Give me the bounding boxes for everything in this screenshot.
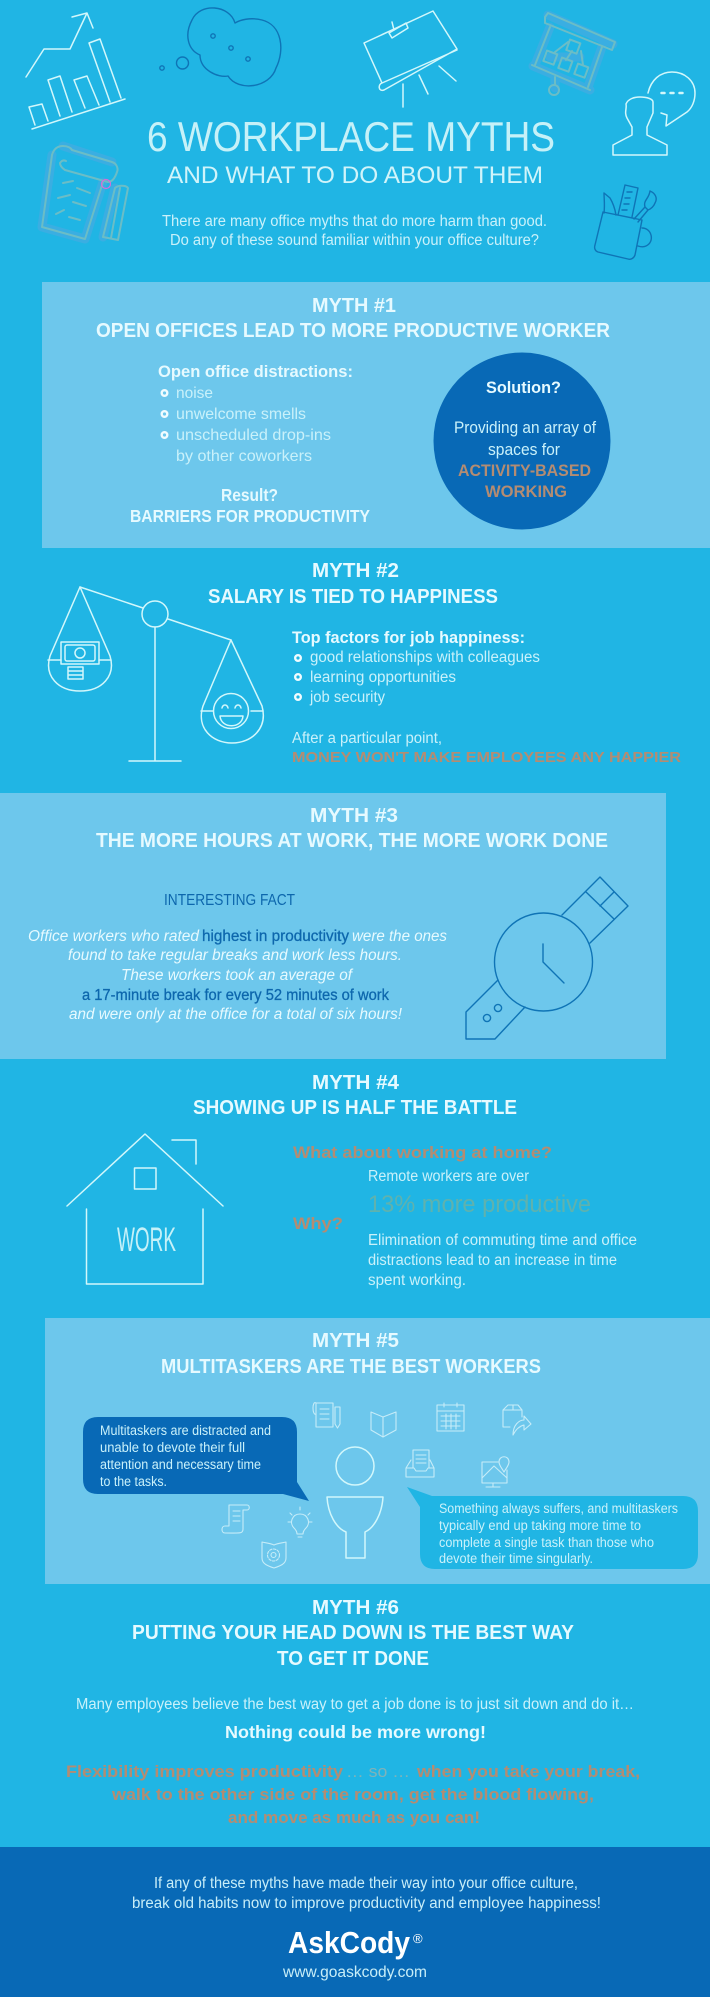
heading: myth 6: PUTTING YOUR HEAD DOWN IS THE BEST WAY [132,1621,574,1644]
icon: inbox tray [406,1450,434,1477]
fact text: These workers took an average of [121,967,354,984]
money callout [292,730,681,766]
speech bubble: something suffers: complete a single task than those who [439,1535,654,1550]
icon: calendar [437,1403,464,1431]
icon: person with speech bubble [613,72,695,155]
closing text [132,1875,601,1912]
remote work text: Remote workers are over [368,1168,529,1185]
flexibility callout: Flexibility improves productivity [66,1763,344,1781]
belief text: Many employees believe the best way to get a job done is to just sit down and do it… [76,1696,634,1713]
icon: clipboard and pen [42,146,128,240]
job happiness factors: job security [309,689,385,706]
speech bubble: something suffers [407,1487,698,1569]
solution circle [434,352,610,530]
heading: myth 1 [96,294,610,342]
title: 6 WORKPLACE MYTHS [147,113,555,160]
heading: myth 3 [96,804,608,852]
distractions list: noise [176,385,213,402]
logo: AskCody: ® [413,1931,423,1946]
heading: myth 3: THE MORE HOURS AT WORK, THE MORE WORK DONE [96,829,608,852]
intro text [162,213,547,249]
heading: myth 6: MYTH #6 [312,1596,399,1619]
distractions list [158,362,353,465]
icon: gear shield [262,1542,286,1568]
heading: myth 4 [193,1071,517,1119]
icon: monitor with pin [482,1462,507,1487]
subtitle: AND WHAT TO DO ABOUT THEM [167,162,543,189]
fact text: and were only at the office for a total of six hours! [69,1006,403,1023]
closing text: If any of these myths have made their way into your office culture, [154,1875,578,1892]
header [26,8,695,259]
panel: myth 1 [42,282,710,548]
icon: house with work label [67,1134,223,1284]
icon: pencil mug [595,185,656,259]
remote work text: Why? [293,1214,343,1233]
money callout: After a particular point, [292,730,442,747]
icon: house with work label: WORK [117,1221,176,1259]
job happiness factors: good relationships with colleagues [310,649,540,666]
job happiness factors: learning opportunities [310,669,456,686]
remote work text: Elimination of commuting time and office [368,1232,637,1249]
heading: myth 2: MYTH #2 [312,559,399,582]
solution circle: spaces for [488,441,560,459]
fact text: Office workers who rated [28,928,200,945]
speech bubble: something suffers: Something always suffers, and multitaskers [439,1501,678,1516]
remote work text: spent working. [368,1272,466,1289]
icon: thought cloud [160,8,281,86]
flexibility callout: and move as much as you can! [228,1809,480,1827]
icon: light bulb [288,1507,312,1537]
footer [0,1847,710,1997]
distractions list: unscheduled drop-ins [176,427,331,444]
speech bubble: distracted: unable to devote their full [100,1440,245,1455]
heading: myth 5: MYTH #5 [312,1329,399,1352]
fact text [28,928,447,1023]
section: myth 4 [67,1071,637,1289]
flexibility callout: walk to the other side of the room, get the blood flowing, [111,1786,594,1804]
heading: myth 1: MYTH #1 [312,294,396,317]
heading: myth 2 [208,559,498,608]
money callout: MONEY WON'T MAKE EMPLOYEES ANY HAPPIER [292,749,681,766]
icon: presentation screen [532,13,615,95]
distractions list: Open office distractions: [158,362,353,381]
panel: myth 5 [45,1318,710,1584]
intro text: Do any of these sound familiar within your office culture? [170,232,539,249]
speech bubble: distracted: attention and necessary time [100,1457,261,1472]
remote work text: distractions lead to an increase in time [368,1252,617,1269]
remote work text [293,1143,637,1289]
icon: growth chart [26,13,125,129]
heading: myth 4: SHOWING UP IS HALF THE BATTLE [193,1096,517,1119]
job happiness factors: Top factors for job happiness: [292,628,525,647]
fact text: were the ones [352,928,447,945]
icon: person outline [327,1447,383,1558]
solution circle: WORKING [485,482,567,501]
icon: box with arrow [503,1405,531,1435]
remote work text: 13% more productive [368,1191,591,1218]
icon: book [371,1412,396,1437]
heading: myth 6: TO GET IT DONE [277,1647,429,1670]
result: BARRIERS FOR PRODUCTIVITY [130,506,370,526]
result [130,485,370,526]
icon: balance scale [48,587,263,761]
solution circle: Providing an array of [454,419,596,437]
icon: wristwatch [466,877,628,1039]
job happiness factors [292,628,540,706]
heading: myth 4: MYTH #4 [312,1071,400,1094]
heading: myth 5: MULTITASKERS ARE THE BEST WORKERS [161,1355,541,1378]
icon: scroll [222,1505,249,1533]
panel: myth 3 [0,793,666,1059]
heading: myth 2: SALARY IS TIED TO HAPPINESS [208,585,498,608]
heading: myth 5 [161,1329,541,1378]
speech bubble: something suffers: typically end up taking more time to [439,1518,641,1533]
section: myth 2 [48,559,681,766]
fact text: highest in productivity [202,928,349,945]
heading: myth 6 [132,1596,574,1670]
fact text: found to take regular breaks and work less hours. [68,947,402,964]
flexibility callout [66,1763,640,1827]
distractions list: by other coworkers [176,448,312,465]
heading: myth 3: MYTH #3 [310,804,398,827]
logo: AskCody: AskCody [288,1925,411,1960]
intro text: There are many office myths that do more harm than good. [162,213,547,230]
solution circle: Solution? [486,378,561,397]
speech bubble: something suffers: devote their time singularly. [439,1551,593,1566]
icon: document and pen [313,1403,340,1428]
task icons [222,1403,531,1568]
result: Result? [221,485,278,505]
closing text: break old habits now to improve productivity and employee happiness! [132,1895,601,1912]
fact text: a 17-minute break for every 52 minutes of work [82,987,389,1004]
flexibility callout: … so … [346,1763,410,1781]
emphasis text: Nothing could be more wrong! [225,1722,486,1742]
section: myth 6 [66,1596,640,1827]
flexibility callout: when you take your break, [416,1763,640,1781]
speech bubble: distracted: Multitaskers are distracted and [100,1423,271,1438]
solution circle: ACTIVITY-BASED [458,461,591,480]
icon: easel board [364,11,457,107]
website: www.goaskcody.com [282,1964,427,1981]
interesting fact label: INTERESTING FACT [164,892,295,909]
heading: myth 1: OPEN OFFICES LEAD TO MORE PRODUCTIVE WORKER [96,319,610,342]
speech bubble: distracted [83,1417,309,1501]
speech bubble: distracted: to the tasks. [100,1474,167,1489]
remote work text: What about working at home? [293,1143,552,1162]
distractions list: unwelcome smells [176,406,306,423]
